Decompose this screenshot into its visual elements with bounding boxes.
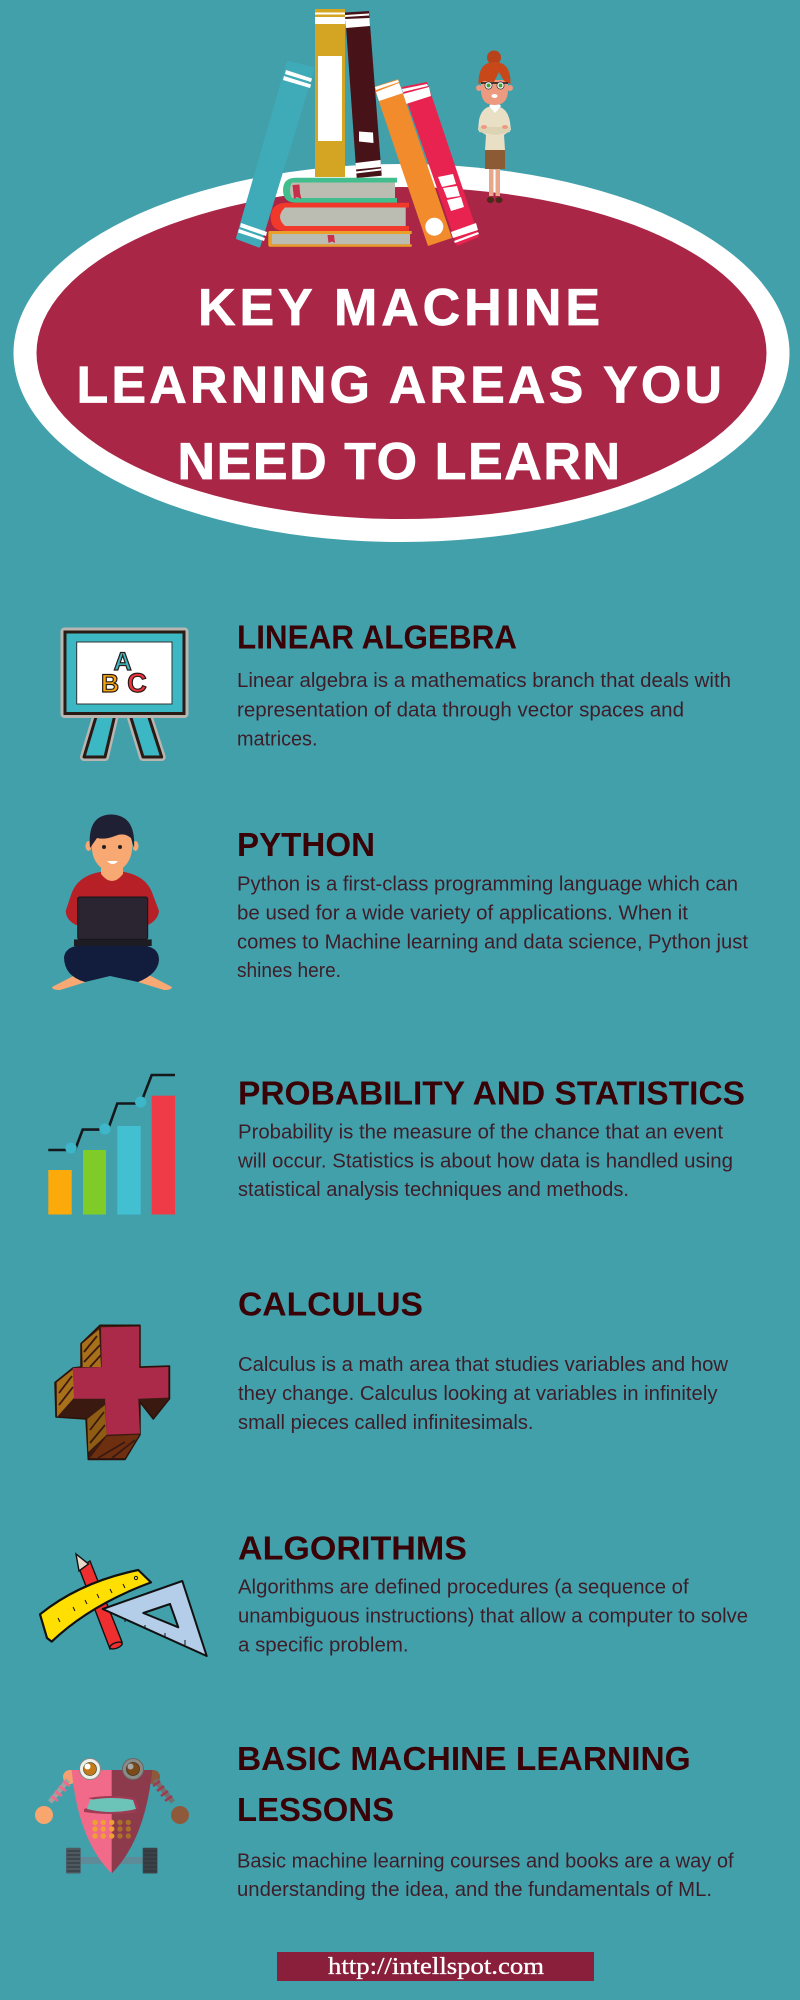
shoulders	[63, 1770, 77, 1784]
body	[72, 1770, 112, 1874]
book: red leaning	[402, 82, 479, 246]
book: orange leaning	[374, 79, 452, 246]
face	[481, 80, 508, 105]
bun and hair	[487, 50, 501, 64]
ruler	[40, 1570, 151, 1642]
shoes	[487, 197, 494, 203]
hair	[90, 814, 134, 848]
footer: source URL bar	[277, 1952, 594, 1981]
illustration: stack of books	[238, 9, 479, 247]
hands	[35, 1806, 53, 1824]
button dots	[92, 1820, 114, 1839]
footer: source URL bar: http://intellspot.com	[328, 1954, 544, 1980]
text: Python description: comes to Machine learning and data science, Python just	[237, 932, 748, 954]
wheels	[66, 1848, 157, 1874]
text: Probability description	[237, 1121, 733, 1201]
text: Linear Algebra description: matrices.	[237, 728, 318, 750]
text: Probability description: statistical analysis techniques and methods.	[238, 1179, 629, 1201]
text: Python description: Python is a first-class programming language which can	[237, 874, 738, 896]
icon: person with laptop	[52, 814, 172, 990]
text: Python description: be used for a wide variety of applications. When it	[237, 902, 688, 924]
glasses and eyes	[481, 82, 508, 84]
set square	[103, 1581, 207, 1656]
text: Calculus description: small pieces called infinitesimals.	[238, 1412, 534, 1434]
icon: 3D plus sign	[55, 1325, 170, 1460]
text: Calculus description	[238, 1354, 729, 1434]
chart: rising bars icon	[48, 1075, 175, 1214]
eyes and mouth	[102, 845, 106, 849]
text: Algorithms description: unambiguous instructions) that allow a computer to solve	[238, 1605, 748, 1627]
heading: Calculus: CALCULUS	[238, 1286, 423, 1323]
text: Algorithms description: Algorithms are defined procedures (a sequence of	[238, 1576, 689, 1598]
title: NEED TO LEARN	[178, 433, 620, 491]
text: Python description	[237, 874, 748, 982]
title	[76, 279, 722, 491]
icon: robot	[35, 1758, 189, 1874]
ears	[476, 85, 482, 91]
text: Calculus description: they change. Calculus looking at variables in infinitely	[238, 1383, 718, 1405]
book: yellow upright	[315, 9, 345, 177]
legs	[64, 945, 159, 982]
laptop screen	[78, 897, 148, 939]
text: Linear Algebra description: Linear algebra is a mathematics branch that deals with	[237, 670, 731, 692]
shirt	[66, 872, 159, 925]
book: green lying	[283, 178, 397, 203]
text: Linear Algebra description: representation of data through vector spaces and	[237, 700, 684, 722]
icon: ABC easel board: B	[101, 670, 119, 698]
neck	[101, 868, 123, 881]
book: orange lying	[268, 231, 412, 247]
text: Probability description: will occur. Statistics is about how data is handled using	[237, 1150, 733, 1172]
heading: Linear Algebra: LINEAR ALGEBRA	[237, 618, 517, 655]
title: LEARNING AREAS YOU	[76, 356, 722, 414]
icon: ABC easel board	[62, 630, 186, 757]
text: Python description: shines here.	[237, 960, 341, 982]
heading: Algorithms: ALGORITHMS	[238, 1529, 467, 1566]
text: Basic ML description	[237, 1850, 734, 1901]
eyes	[80, 1758, 100, 1780]
text: Algorithms description	[238, 1576, 748, 1656]
book: dark maroon	[345, 11, 382, 178]
text: Basic ML description: understanding the idea, and the fundamentals of ML.	[237, 1879, 712, 1901]
axle	[80, 1857, 143, 1864]
heading: Probability and Statistics: PROBABILITY AND STATISTICS	[238, 1074, 745, 1111]
icon: ABC easel board: C	[127, 668, 147, 698]
title: KEY MACHINE	[198, 279, 600, 337]
laptop base	[74, 939, 152, 946]
mouth screen	[84, 1796, 139, 1814]
arms	[50, 1780, 68, 1802]
icon: pencil, ruler and set square	[40, 1554, 207, 1656]
face	[86, 841, 92, 851]
book: red lying	[271, 203, 409, 231]
text: Algorithms description: a specific problem.	[238, 1634, 409, 1656]
pencil	[76, 1554, 123, 1650]
text: Linear Algebra description	[237, 670, 731, 750]
sweater	[478, 107, 511, 150]
heading: Basic Machine Learning Lessons: LESSONS	[237, 1791, 394, 1828]
text: Probability description: Probability is the measure of the chance that an event	[238, 1121, 723, 1143]
icon: ABC easel board: A	[114, 648, 132, 676]
heading: Basic Machine Learning Lessons	[237, 1740, 691, 1828]
heading: Python: PYTHON	[237, 826, 375, 863]
text: Basic ML description: Basic machine learning courses and books are a way of	[237, 1850, 734, 1872]
feet	[52, 970, 172, 990]
collar	[489, 103, 501, 113]
illustration: woman with folded arms	[476, 50, 513, 203]
legs	[489, 168, 494, 196]
book: teal leaning	[238, 62, 313, 246]
header ellipse badge	[14, 164, 790, 542]
heading: Basic Machine Learning Lessons: BASIC MACHINE LEARNING	[237, 1740, 691, 1777]
text: Calculus description: Calculus is a math area that studies variables and how	[238, 1354, 729, 1376]
mouth	[492, 94, 498, 98]
skirt	[485, 150, 505, 169]
